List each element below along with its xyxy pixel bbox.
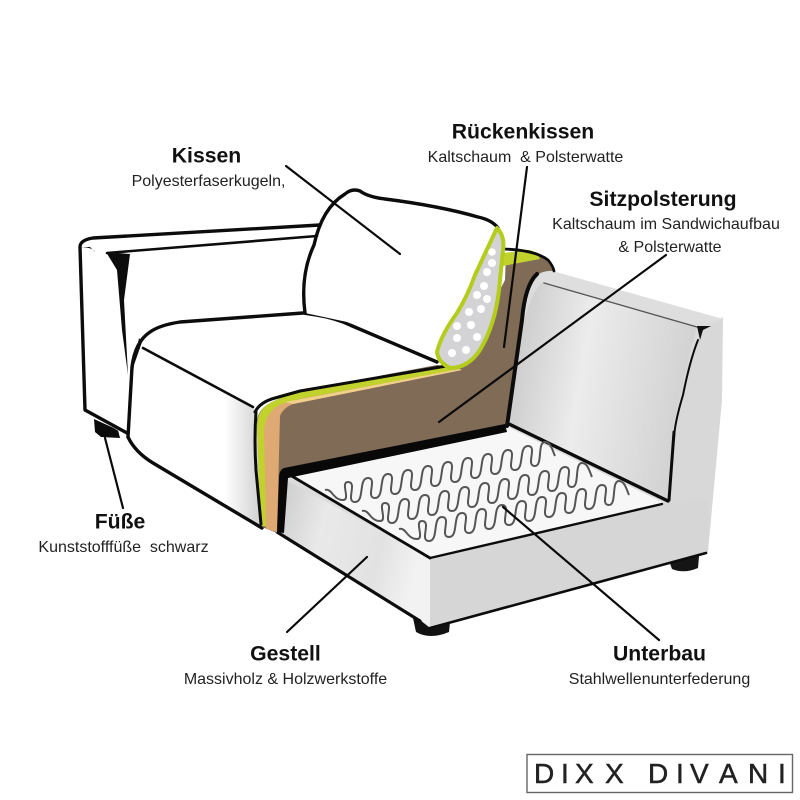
foot: front: [413, 618, 450, 636]
leader line: Sitzpolsterung: [439, 255, 666, 422]
leader line: Kissen: [286, 166, 400, 254]
label: Rückenkissen: Rückenkissen: [452, 120, 594, 144]
label: Gestell: Massivholz & Holzwerkstoffe: [184, 671, 387, 688]
logo: DIXX DIVANI: DIVANI: [648, 758, 786, 789]
platform: [290, 427, 664, 558]
leader line: Füße: [105, 438, 123, 508]
green top at back: [503, 250, 540, 266]
illustration: sofa cutaway: [80, 190, 723, 636]
label: Kissen: [132, 144, 285, 190]
arm: left armrest: [80, 224, 322, 437]
label: Rückenkissen: Kaltschaum & Polsterwatte: [428, 149, 623, 166]
logo: DIXX DIVANI: DIXX: [534, 758, 624, 789]
label: Sitzpolsterung: Sitzpolsterung: [589, 188, 737, 211]
label: Gestell: Gestell: [250, 642, 321, 666]
leader line: Rückenkissen: [504, 167, 527, 347]
label: Unterbau: Stahlwellenunterfederung: [569, 671, 750, 688]
right arm top edge: [538, 272, 723, 326]
label: Unterbau: [569, 642, 750, 688]
right arm outer side: [668, 317, 723, 564]
tan layer: [264, 369, 462, 532]
base front side: [430, 500, 708, 627]
label: Gestell: [184, 642, 387, 688]
foot: rear right: [668, 556, 699, 571]
label: Füße: Kunststofffüße schwarz: [38, 539, 209, 556]
gray frame: right arm and base: [277, 271, 723, 628]
label: Kissen: Kissen: [172, 144, 241, 168]
pillow cross-section: [437, 228, 503, 368]
label: Sitzpolsterung: & Polsterwatte: [618, 239, 722, 256]
label: Rückenkissen: [428, 120, 623, 166]
foot: rear left: [94, 419, 120, 438]
label: Kissen: Polyesterfaserkugeln,: [132, 173, 285, 190]
label: Sitzpolsterung: [552, 188, 780, 256]
leader line: Gestell: [287, 557, 367, 632]
springs: steel wave suspension: [325, 442, 629, 541]
leader line: Unterbau: [503, 507, 659, 640]
label: Unterbau: Unterbau: [613, 642, 706, 666]
seat foam: brown core with green and tan layers: [255, 249, 554, 533]
cushion: seat: [128, 313, 460, 528]
right arm inner face: [509, 282, 697, 501]
green layer: [257, 366, 460, 528]
cushion: back pillow: [304, 190, 498, 355]
logo: DIXX DIVANI: [527, 754, 792, 792]
label: Sitzpolsterung: Kaltschaum im Sandwichaufbau: [552, 216, 780, 233]
label: Füße: [38, 510, 209, 556]
base left side: [278, 477, 430, 627]
label: Füße: Füße: [95, 510, 146, 534]
